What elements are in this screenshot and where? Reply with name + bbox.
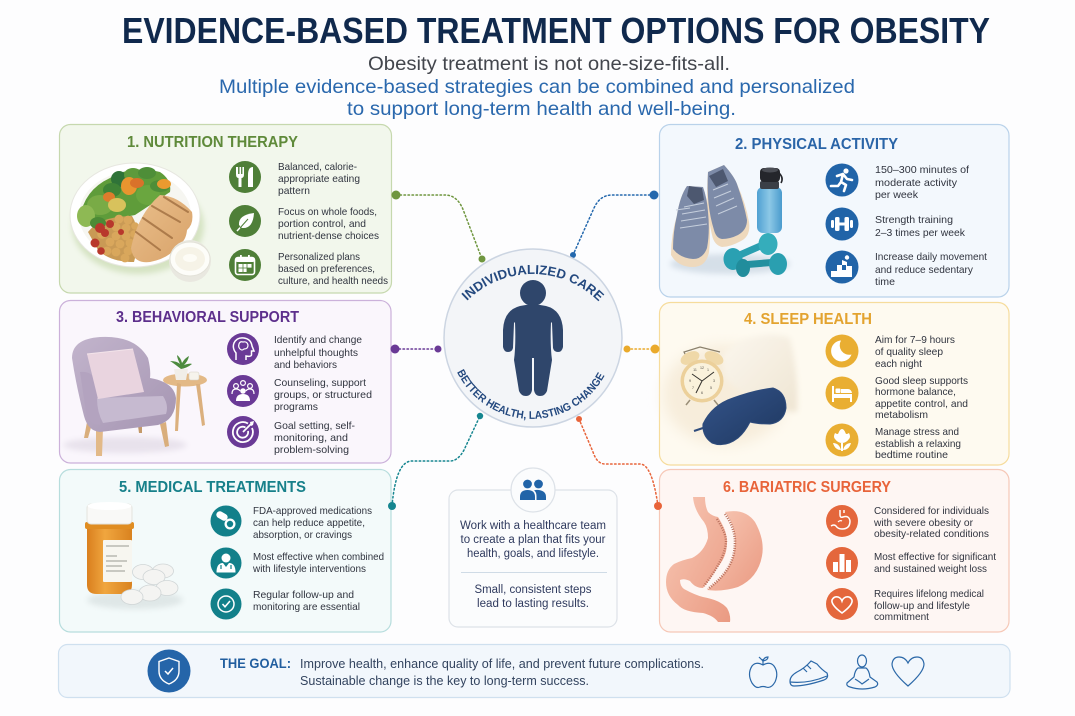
text: lifestyle interventions <box>252 551 384 575</box>
text: lifelong follow-up: Requires lifelong medical <box>874 588 984 600</box>
text: FDA-approved medications: can help reduce appetite, <box>253 517 365 529</box>
text: goal statement: Improve health, enhance quality of life, and prevent future complications. <box>300 657 704 671</box>
text: FDA-approved medications: absorption, or cravings <box>253 529 352 541</box>
text: thoughts and behaviors <box>274 334 362 371</box>
text: FDA-approved medications <box>253 505 372 541</box>
image: alarm clock, pillow and sleep mask: 3 <box>713 379 715 383</box>
label: the goal: THE GOAL: <box>220 656 291 671</box>
image: sneakers, bottle and dumbbells <box>670 165 790 277</box>
text: thoughts and behaviors: Identify and change <box>274 334 362 346</box>
text: lifelong follow-up <box>874 588 984 623</box>
connector: medical treatments to center <box>388 413 483 510</box>
text: personalized plans: based on preferences, <box>278 263 375 275</box>
text: strength training: Strength training <box>875 214 953 226</box>
connector: sleep health to center <box>624 344 660 354</box>
text: small consistent steps: lead to lasting results. <box>477 598 589 610</box>
text: small consistent steps <box>474 584 592 610</box>
heading: physical activity: 2. PHYSICAL ACTIVITY <box>735 136 899 153</box>
text: who is considered: with severe obesity or <box>873 517 973 529</box>
connector: nutrition to center <box>392 190 486 262</box>
connector: behavioral support to center <box>390 344 442 354</box>
text: weight loss: Most effective for significant <box>874 551 996 563</box>
center circle: individualized care <box>443 248 623 428</box>
text: follow-up: Regular follow-up and <box>253 589 354 601</box>
icon: heart outline <box>892 657 924 686</box>
icon: bed <box>826 376 858 410</box>
image: pill bottle and tablets <box>85 502 183 609</box>
text: hormone balance <box>875 375 968 421</box>
panel: behavioral support <box>60 300 391 463</box>
icon: calendar <box>229 249 261 281</box>
image: alarm clock, pillow and sleep mask: 6 <box>701 391 703 395</box>
subtitle <box>219 53 855 120</box>
image: alarm clock, pillow and sleep mask: 1 <box>707 368 709 372</box>
icon: head with brain <box>227 333 259 365</box>
text: follow-up <box>253 589 360 613</box>
text: who is considered: obesity-related conditions <box>874 528 989 540</box>
icon: apple <box>750 657 777 688</box>
image: alarm clock, pillow and sleep mask: 12 <box>700 366 704 370</box>
text: hormone balance: metabolism <box>875 409 928 421</box>
text: hours of sleep: of quality sleep <box>875 346 943 358</box>
image: stomach after sleeve surgery <box>666 497 763 622</box>
text: goal setting: monitoring, and <box>274 432 348 444</box>
text: hormone balance: Good sleep supports <box>875 375 968 387</box>
text: goal statement <box>300 657 704 688</box>
image: alarm clock, pillow and sleep mask: 5 <box>710 386 712 390</box>
icon: target <box>227 416 259 448</box>
image: alarm clock, pillow and sleep mask: 7 <box>692 386 694 390</box>
title: EVIDENCE-BASED TREATMENT OPTIONS FOR OBESITY <box>122 10 990 51</box>
icon: meditating person <box>847 655 878 689</box>
heading: sleep health: 4. SLEEP HEALTH <box>744 311 872 328</box>
image: alarm clock, pillow and sleep mask <box>663 335 797 445</box>
icon: flower <box>826 424 858 456</box>
text: daily movement: time <box>875 276 895 288</box>
text: who is considered <box>873 505 989 540</box>
icon: shield <box>148 650 190 692</box>
image: plate of food <box>70 163 211 282</box>
text: bedtime routine <box>875 426 961 461</box>
connector: physical activity to center <box>570 190 658 258</box>
icon: stairs <box>826 250 858 284</box>
image: alarm clock, pillow and sleep mask: 11 <box>693 368 697 372</box>
icon: fork and knife <box>229 161 261 193</box>
panel: sleep health <box>660 302 1009 465</box>
icon: person silhouette <box>503 280 563 396</box>
text: goal setting <box>274 420 355 456</box>
panel: nutrition therapy <box>60 124 392 293</box>
icon: heart <box>826 588 858 620</box>
text: follow-up: monitoring are essential <box>253 601 360 613</box>
text: bedtime routine: bedtime routine <box>875 449 948 461</box>
heading: medical treatments: 5. MEDICAL TREATMENTS <box>119 479 306 496</box>
text: weekly minutes: moderate activity <box>875 177 958 189</box>
text: eating pattern: Balanced, calorie- <box>278 161 357 173</box>
text: hours of sleep <box>875 334 955 370</box>
text: hours of sleep: each night <box>875 358 922 370</box>
heading: bariatric surgery: 6. BARIATRIC SURGERY <box>723 479 892 496</box>
text: counseling: programs <box>274 401 318 413</box>
text: work with a healthcare team: Work with a healthcare team <box>460 520 606 532</box>
text: work with a healthcare team <box>460 520 606 560</box>
icon: moon <box>826 334 858 368</box>
text: hormone balance: appetite control, and <box>875 398 968 410</box>
text: personalized plans: culture, and health needs <box>278 275 388 287</box>
text: eating pattern: appropriate eating <box>278 173 360 185</box>
text: work with a healthcare team: health, goals, and lifestyle. <box>467 548 599 560</box>
text: weekly minutes <box>875 164 969 201</box>
panel: the goal <box>58 644 1010 698</box>
text: who is considered: Considered for individuals <box>874 505 989 517</box>
icon: bar chart <box>826 547 858 579</box>
text: goal setting: Goal setting, self- <box>274 420 355 432</box>
icon: check mark <box>210 588 242 620</box>
text: eating pattern: pattern <box>278 185 310 197</box>
text: FDA-approved medications: FDA-approved medications <box>253 505 372 517</box>
icon: pills <box>210 506 242 536</box>
connector: bariatric surgery to center <box>576 416 662 510</box>
text: daily movement: and reduce sedentary <box>875 264 974 276</box>
image: alarm clock, pillow and sleep mask: 9 <box>689 379 691 383</box>
text: bedtime routine: establish a relaxing <box>875 438 961 450</box>
text: daily movement: Increase daily movement <box>875 251 987 263</box>
text: weight loss: and sustained weight loss <box>874 563 987 575</box>
text: weight loss <box>874 551 996 575</box>
text: bedtime routine: Manage stress and <box>875 426 959 438</box>
text: lifelong follow-up: commitment <box>874 611 929 623</box>
text: personalized plans: Personalized plans <box>278 251 360 263</box>
text: weekly minutes: per week <box>875 189 919 201</box>
text: eating pattern <box>278 161 360 197</box>
curved label: better health, lasting change: BETTER HEALTH, LASTING CHANGE <box>457 369 604 420</box>
text: lifelong follow-up: follow-up and lifestyle <box>874 600 970 612</box>
text: daily movement <box>875 251 987 288</box>
panel: medical treatments <box>60 470 391 632</box>
text: counseling: groups, or structured <box>274 389 372 401</box>
text: whole foods: portion control, and <box>278 218 366 230</box>
text: strength training: 2–3 times per week <box>875 227 966 239</box>
text: hours of sleep: Aim for 7–9 hours <box>875 334 955 346</box>
text: small consistent steps: Small, consistent steps <box>474 584 592 596</box>
text: hormone balance: hormone balance, <box>875 386 956 398</box>
text: lifestyle interventions: with lifestyle interventions <box>252 563 366 575</box>
text: whole foods: Focus on whole foods, <box>278 206 377 218</box>
icon: leaf <box>229 205 261 237</box>
text: goal statement: Sustainable change is the key to long-term success. <box>300 674 589 688</box>
text: work with a healthcare team: to create a plan that fits your <box>460 534 606 546</box>
panel: physical activity <box>660 124 1009 297</box>
icon: runner <box>826 164 858 196</box>
text: strength training <box>875 214 966 239</box>
icon: dumbbell <box>826 208 858 240</box>
text: whole foods: nutrient-dense choices <box>278 230 379 242</box>
text: lifestyle interventions: Most effective when combined <box>253 551 384 563</box>
subtitle: Obesity treatment is not one-size-fits-all. <box>368 53 730 75</box>
text: whole foods <box>278 206 379 242</box>
text: goal setting: problem-solving <box>274 444 349 456</box>
image: armchair and side table <box>63 337 207 456</box>
icon: support group <box>227 375 259 407</box>
text: counseling: Counseling, support <box>274 377 366 389</box>
text: weekly minutes: 150–300 minutes of <box>875 164 969 176</box>
icon: shoe <box>790 661 828 686</box>
heading: behavioral support: 3. BEHAVIORAL SUPPORT <box>116 309 299 326</box>
subtitle: Multiple evidence-based strategies can be combined and personalized <box>219 76 855 98</box>
text: counseling <box>274 377 372 413</box>
heading: nutrition therapy: 1. NUTRITION THERAPY <box>127 134 299 151</box>
icon: two people <box>511 468 555 512</box>
panel: healthcare team note <box>449 468 617 627</box>
text: personalized plans <box>278 251 388 287</box>
text: thoughts and behaviors: unhelpful thoughts <box>274 347 358 359</box>
icon: stomach <box>826 505 858 537</box>
subtitle: to support long-term health and well-being. <box>347 98 736 120</box>
icon: doctor <box>210 548 242 578</box>
text: thoughts and behaviors: and behaviors <box>274 359 337 371</box>
curved label: individualized care: INDIVIDUALIZED CARE <box>461 265 604 302</box>
panel: bariatric surgery <box>660 470 1009 632</box>
